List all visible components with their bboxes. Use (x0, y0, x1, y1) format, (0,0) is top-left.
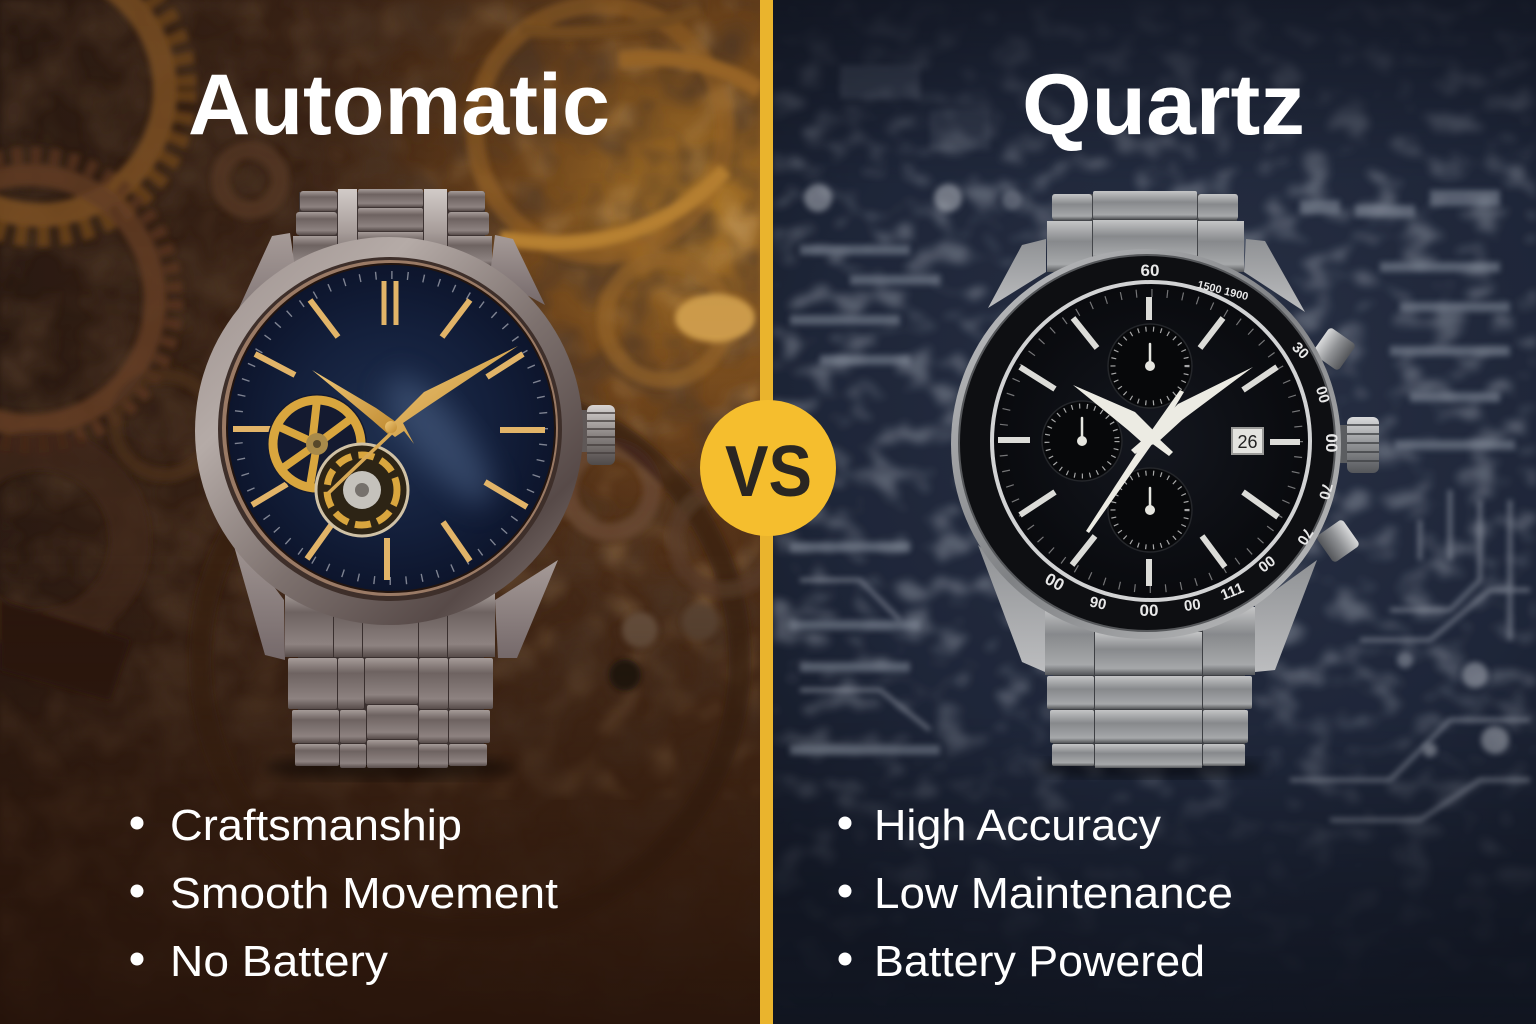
hands (312, 346, 518, 494)
sub-dials (1042, 324, 1192, 552)
bezel numerals: 60 (1141, 261, 1159, 280)
bezel numerals: 1500 1900 (1196, 279, 1249, 303)
bezel numerals (1042, 261, 1341, 620)
crown (1336, 417, 1379, 473)
pushers (1312, 327, 1360, 563)
lugs (978, 239, 1317, 672)
lower bracelet (1045, 607, 1255, 768)
dial (994, 284, 1308, 598)
title: Quartz: Quartz (1022, 57, 1305, 153)
case and bezel (951, 249, 1341, 639)
gears backdrop (0, 0, 760, 772)
panel: automatic background (0, 0, 775, 1024)
crown (578, 405, 615, 465)
bullet: Low Maintenance: Low Maintenance (874, 869, 1233, 918)
date window: 26 (1237, 432, 1258, 452)
bezel numerals: 00 (1322, 434, 1341, 452)
automatic watch (195, 189, 615, 780)
quartz watch (951, 191, 1379, 778)
VS badge: VS (725, 432, 812, 512)
bezel numerals: 00 (1183, 596, 1202, 615)
quartz feature list (838, 801, 1233, 986)
bezel numerals: 90 (1088, 594, 1108, 614)
hands (1073, 367, 1253, 533)
open-heart skeleton (267, 394, 408, 536)
bullet: Battery Powered: Battery Powered (874, 937, 1205, 986)
automatic feature list (130, 801, 558, 986)
bezel numerals: 00 (1312, 384, 1333, 405)
hour markers (998, 297, 1300, 586)
bezel numerals: 111 (1218, 580, 1246, 604)
bullet: Craftsmanship: Craftsmanship (170, 801, 462, 850)
bullet: High Accuracy: High Accuracy (874, 801, 1161, 850)
bullet: Smooth Movement: Smooth Movement (170, 869, 558, 918)
circuit traces (800, 490, 1530, 820)
VS badge (700, 400, 836, 536)
upper bracelet (293, 189, 492, 268)
bezel numerals: 00 (1255, 553, 1279, 576)
divider (760, 0, 773, 1024)
date window (1232, 428, 1263, 454)
title: Automatic: Automatic (188, 57, 610, 153)
bullet: No Battery: No Battery (170, 937, 388, 986)
panel: quartz background (773, 0, 1536, 1024)
lower bracelet (285, 593, 495, 768)
bezel numerals: 00 (1042, 569, 1067, 595)
circuit backdrop (790, 65, 1515, 757)
bezel numerals: 70 (1315, 481, 1336, 501)
case (195, 237, 583, 625)
hour markers (233, 281, 545, 580)
upper bracelet (1047, 191, 1244, 272)
bezel numerals: 70 (1293, 525, 1316, 548)
bezel numerals: 30 (1288, 339, 1312, 363)
lugs (222, 233, 558, 660)
bezel numerals: 00 (1140, 601, 1158, 620)
dial (227, 264, 555, 592)
